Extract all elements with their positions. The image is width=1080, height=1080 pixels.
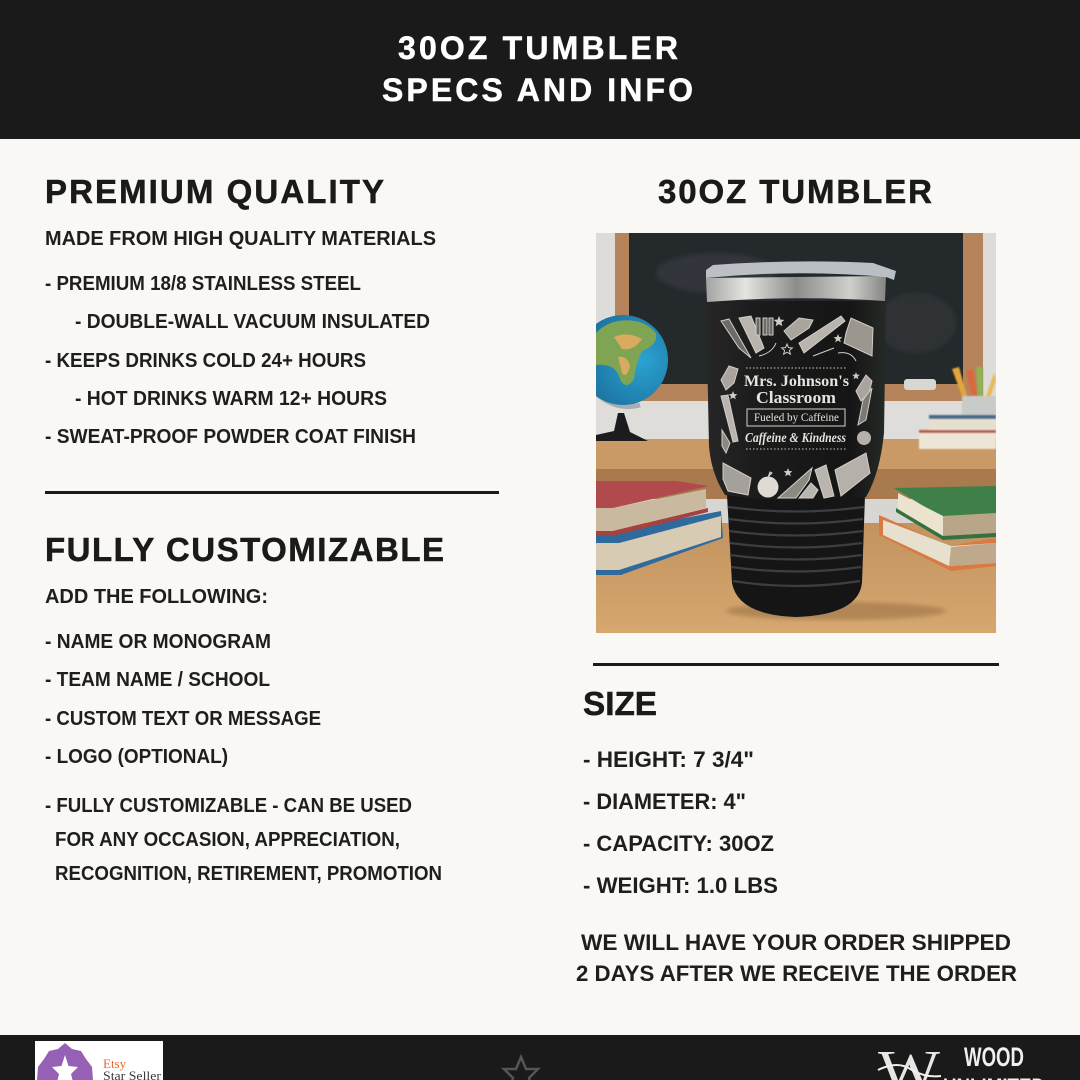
text block: materials list: - DOUBLE-WALL VACUUM INSULATED xyxy=(75,311,430,333)
pencil xyxy=(721,319,751,358)
panel: premium quality xyxy=(45,173,436,448)
text block: materials list: MADE FROM HIGH QUALITY MATERIALS xyxy=(45,228,436,250)
text block: dimensions: - WEIGHT: 1.0 LBS xyxy=(583,873,778,898)
right books xyxy=(879,486,996,571)
left ruler xyxy=(721,395,738,442)
text block: dimensions: - HEIGHT: 7 3/4" xyxy=(583,747,754,772)
right eraser xyxy=(856,375,872,401)
left books xyxy=(596,481,723,575)
text block: dimensions: - DIAMETER: 4" xyxy=(583,789,746,814)
wood unlimited logo: WOOD xyxy=(964,1042,1024,1072)
open book xyxy=(844,318,873,356)
text block: customization options xyxy=(45,586,442,885)
wood unlimited logo xyxy=(878,1038,1045,1080)
footer band xyxy=(0,1035,1080,1080)
text block: materials list: - KEEPS DRINKS COLD 24+ HOURS xyxy=(45,350,366,372)
text block: customization options: - TEAM NAME / SCHOOL xyxy=(45,669,270,691)
text block: customization options: - CUSTOM TEXT OR MESSAGE xyxy=(45,708,321,730)
tumbler xyxy=(706,261,896,617)
right pencil xyxy=(858,388,872,425)
engraved text: Caffeine & Kindness xyxy=(745,431,846,446)
ruler xyxy=(739,316,764,353)
title xyxy=(382,30,693,108)
back books xyxy=(919,415,996,449)
product photo: engraved tumbler on classroom desk xyxy=(578,233,996,633)
engraved text: Fueled by Caffeine xyxy=(754,410,839,424)
heading: size: SIZE xyxy=(583,685,657,722)
icon: star xyxy=(504,1057,538,1080)
bottom eraser xyxy=(799,483,818,498)
bottom left book xyxy=(723,463,751,495)
text block: dimensions xyxy=(583,747,778,898)
text block: materials list: - PREMIUM 18/8 STAINLESS STEEL xyxy=(45,273,361,295)
panel: size xyxy=(583,685,778,898)
tabletop xyxy=(596,523,996,633)
engraved text: Classroom xyxy=(756,388,836,407)
header band xyxy=(0,0,1080,139)
tumbler body xyxy=(706,301,886,501)
etsy star seller badge xyxy=(35,1041,163,1080)
bottom apple xyxy=(758,476,778,498)
bottom pencil xyxy=(778,468,812,498)
globe xyxy=(596,315,668,441)
left eraser xyxy=(721,366,738,390)
text block: materials list: - HOT DRINKS WARM 12+ HOURS xyxy=(75,388,387,410)
text block: dimensions: - CAPACITY: 30OZ xyxy=(583,831,774,856)
arrows xyxy=(759,343,856,361)
chalkboard xyxy=(615,233,983,401)
bottom ruler xyxy=(815,465,834,498)
back desk xyxy=(596,439,996,499)
heading: fully customizable: FULLY CUSTOMIZABLE xyxy=(45,531,444,568)
text block: customization options: - NAME OR MONOGRAM xyxy=(45,631,271,653)
table shadow xyxy=(726,602,946,620)
steel rim xyxy=(706,276,886,302)
heading: premium quality: PREMIUM QUALITY xyxy=(45,173,384,210)
eraser xyxy=(784,318,813,340)
right apple xyxy=(857,431,871,445)
text block: customization options: - LOGO (OPTIONAL) xyxy=(45,746,228,768)
engraved stars xyxy=(729,316,860,476)
shipping note: 2 DAYS AFTER WE RECEIVE THE ORDER xyxy=(576,961,1017,986)
text block: customization options: - FULLY CUSTOMIZABLE - CAN BE USED xyxy=(45,795,412,817)
text block: customization options: ADD THE FOLLOWING: xyxy=(45,586,268,608)
text block: customization options: RECOGNITION, RETIREMENT, PROMOTION xyxy=(55,863,442,885)
heading: 30oz tumbler: 30OZ TUMBLER xyxy=(658,173,932,210)
title: 30OZ TUMBLER xyxy=(398,30,678,66)
divider xyxy=(593,663,999,666)
title: SPECS AND INFO xyxy=(382,72,693,108)
pencil cup xyxy=(952,367,996,415)
bottom right book xyxy=(835,453,870,496)
shipping note xyxy=(576,930,1017,986)
crayons xyxy=(756,318,773,335)
clear lid xyxy=(706,261,896,280)
long ruler xyxy=(799,316,845,353)
etsy star seller badge: Etsy xyxy=(103,1056,127,1071)
text block: materials list: - SWEAT-PROOF POWDER COAT FINISH xyxy=(45,426,416,448)
engraved text: Mrs. Johnson's xyxy=(744,373,849,390)
engraved school doodles xyxy=(721,316,873,498)
text block: materials list xyxy=(45,228,436,448)
tumbler lower ribbed base xyxy=(727,495,865,617)
text block: customization options: FOR ANY OCCASION, APPRECIATION, xyxy=(55,829,400,851)
panel: fully customizable xyxy=(45,531,444,885)
engraved text xyxy=(744,368,849,449)
shipping note: WE WILL HAVE YOUR ORDER SHIPPED xyxy=(581,930,1011,955)
